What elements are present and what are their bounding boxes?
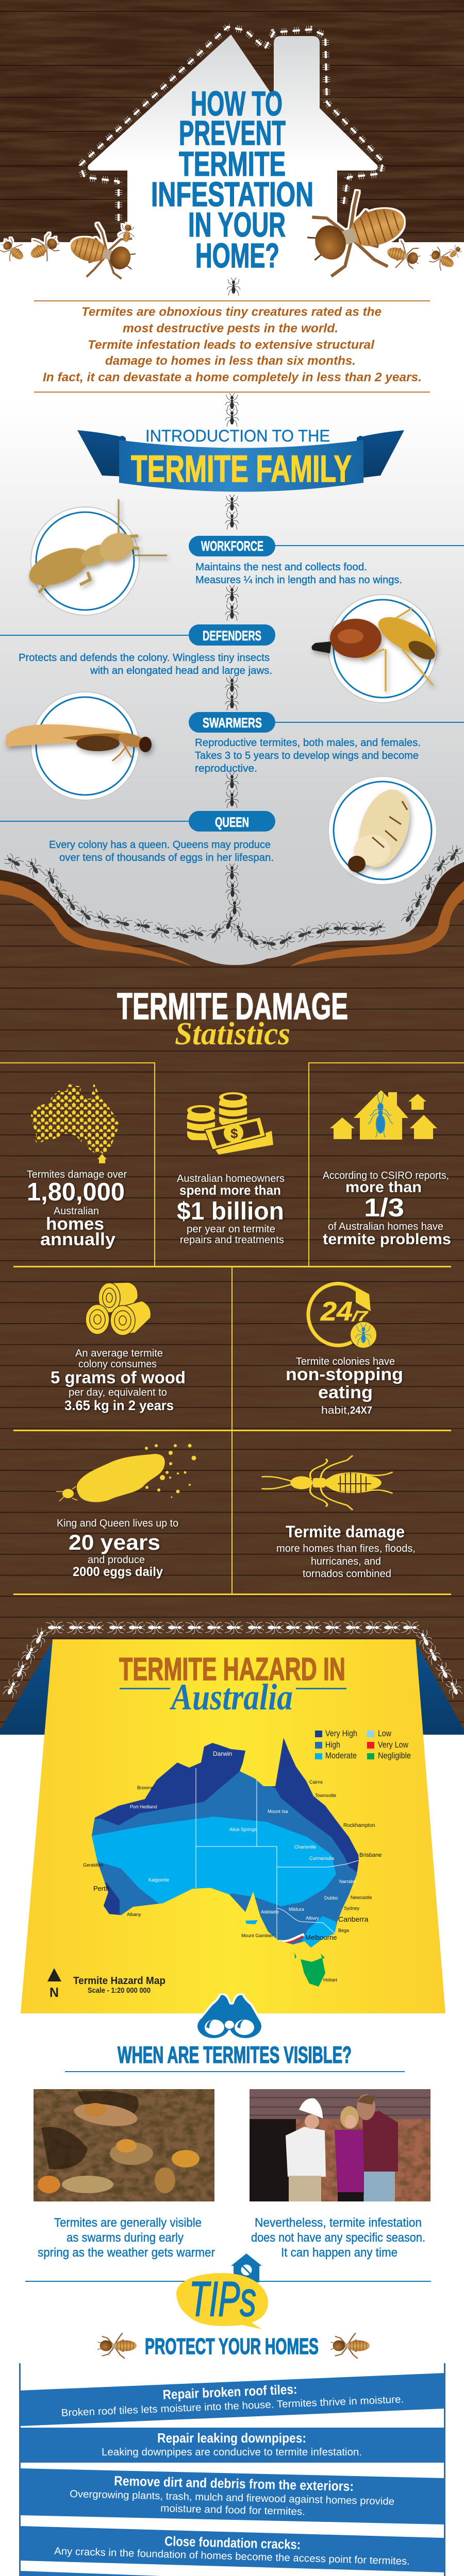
stat: spend: per year on termite — [187, 1224, 275, 1235]
map labels — [83, 1750, 382, 1982]
map labels: Dubbo — [324, 1895, 338, 1901]
white termite border — [2, 1621, 464, 1699]
stat: one third — [323, 1170, 451, 1248]
stat: termite damage comparison: tornados combined — [303, 1568, 391, 1580]
stat: spend: $1 billion — [177, 1198, 284, 1225]
map legend: Very Low — [378, 1740, 409, 1750]
stat: non-stopping eating: Termite colonies have — [296, 1356, 395, 1367]
stat: non-stopping eating: 24X7 — [350, 1405, 372, 1416]
icon: 24/7 clock — [308, 1283, 376, 1348]
workforce text — [195, 562, 402, 586]
swarmers text: Reproductive termites, both males, and females. — [195, 737, 421, 749]
stat: king and queen lifespan: King and Queen lives up to — [57, 1518, 178, 1529]
map legend: Low — [378, 1728, 392, 1738]
title: IN YOUR — [188, 206, 286, 244]
map labels: Mount Isa — [268, 1809, 288, 1814]
orange soil bands — [0, 880, 464, 967]
stat: king and queen lifespan: 2000 eggs daily — [73, 1565, 163, 1579]
swarmers text: reproductive. — [195, 763, 257, 774]
stat: king and queen lifespan — [57, 1518, 178, 1579]
tip: dirt and debris: Remove dirt and debris from the exteriors: — [114, 2473, 354, 2494]
visible text right: Nevertheless, termite infestation — [255, 2216, 422, 2230]
workforce text: Maintains the nest and collects food. — [195, 562, 367, 573]
title: HOME? — [195, 236, 279, 275]
icon: coins and cash — [187, 1092, 273, 1155]
map labels: Sydney — [344, 1906, 360, 1911]
termite trail around house — [80, 27, 383, 221]
stat: spend: repairs and treatments — [180, 1234, 284, 1246]
map legend: Very High — [325, 1728, 357, 1738]
intro paragraph — [43, 305, 422, 384]
map labels: Mount Gambier — [241, 1933, 273, 1938]
hazard heading: TERMITE HAZARD IN — [119, 1652, 345, 1687]
map labels: Albany — [127, 1912, 141, 1917]
intro paragraph: Termites are obnoxious tiny creatures rated as the — [81, 305, 382, 319]
visible text left: as swarms during early — [67, 2231, 184, 2245]
statistics wood background — [0, 855, 464, 1735]
stat: spend: Australian homeowners — [177, 1173, 285, 1184]
title: TERMITE — [179, 145, 286, 183]
workforce text: Measures ¼ inch in length and has no wings. — [195, 574, 402, 586]
tip: foundation cracks: Any cracks in the foundation of homes become the access point for termites. — [54, 2546, 410, 2567]
stat: homes damaged: annually — [40, 1230, 115, 1249]
photo: inspector with homeowners — [250, 2089, 430, 2201]
visible text right: does not have any specific season. — [251, 2231, 425, 2245]
map labels: Port Hedland — [130, 1804, 157, 1809]
stat: termite damage comparison: more homes than fires, floods, — [276, 1543, 416, 1554]
intro section background — [0, 242, 464, 965]
tip: roof tiles: Repair broken roof tiles: — [162, 2381, 297, 2402]
protect heading: PROTECT YOUR HOMES — [145, 2334, 319, 2359]
map caption: Scale - 1:20 000 000 — [88, 1986, 151, 1995]
statistics script heading: Statistics — [175, 1016, 290, 1052]
defender termite — [311, 608, 442, 691]
map labels: Brisbane — [359, 1852, 382, 1858]
icon: termite silhouette — [261, 1455, 393, 1510]
intro rule top — [34, 300, 430, 301]
map caption — [73, 1975, 165, 1995]
stat: wood consumption: An average termite — [75, 1348, 163, 1359]
tips badge — [176, 2272, 268, 2329]
intro paragraph: Termite infestation leads to extensive structural — [88, 338, 375, 352]
map labels: Hobart — [323, 1977, 338, 1982]
stat: non-stopping eating — [286, 1356, 403, 1416]
map labels: Geraldton — [83, 1862, 104, 1868]
stat: homes damaged: homes — [46, 1214, 104, 1234]
map labels: Bega — [338, 1928, 349, 1933]
tip: dirt and debris: moisture and food for termites. — [160, 2503, 305, 2518]
queen label: QUEEN — [215, 815, 249, 830]
defenders text: Protects and defends the colony. Wingless tiny insects — [19, 652, 270, 664]
map of Australia — [77, 1738, 382, 1987]
queen text: over tens of thousands of eggs in her lifespan. — [59, 852, 274, 863]
hazard poster — [21, 1639, 445, 2013]
banner heading large: TERMITE FAMILY — [131, 448, 352, 490]
stat: non-stopping eating: non-stopping — [286, 1365, 403, 1384]
termite chain — [220, 393, 241, 933]
icon: 24/7 clock: 24 — [320, 1297, 353, 1327]
swarmer termite — [6, 724, 152, 761]
title: HOW TO — [191, 84, 283, 123]
visible text right — [251, 2216, 425, 2260]
stat: one third: more than — [345, 1179, 422, 1196]
workforce label: WORKFORCE — [201, 538, 263, 554]
protect heading — [97, 2333, 370, 2359]
queen section — [0, 776, 437, 885]
hazard script heading: Australia — [170, 1676, 293, 1718]
icon: binoculars — [197, 1995, 261, 2038]
tip: dirt and debris: Overgrowing plants, trash, mulch and firewood against homes provide — [70, 2488, 394, 2507]
title: INFESTATION — [151, 175, 313, 214]
brown termites crawling on house base — [0, 180, 464, 287]
map labels: Broome — [137, 1785, 154, 1790]
stat: wood consumption: per day, equivalent to — [69, 1387, 167, 1398]
stat: homes damaged: Termites damage over — [27, 1169, 127, 1180]
Tasmania — [301, 1958, 325, 1987]
tips badge: TIPs — [189, 2272, 256, 2327]
tips rule — [25, 2281, 431, 2282]
icon: logs — [86, 1282, 151, 1335]
map legend: High — [325, 1740, 340, 1750]
workforce termite — [24, 499, 167, 593]
title: PREVENT — [179, 114, 286, 152]
stat: wood consumption: colony consumes — [78, 1359, 157, 1370]
stat: one third: of Australian homes have — [328, 1221, 443, 1232]
stat: wood consumption: 5 grams of wood — [51, 1368, 186, 1387]
tip: downpipes: Repair leaking downpipes: — [157, 2430, 306, 2446]
defenders text: with an elongated head and large jaws. — [90, 665, 272, 676]
icon: houses forming Australia — [31, 1082, 119, 1163]
statistics heading: TERMITE DAMAGE — [117, 986, 348, 1027]
map labels: Adelaide — [261, 1909, 279, 1914]
statistics grid lines — [0, 1062, 464, 1595]
swarmers label: SWARMERS — [203, 715, 262, 731]
tip: foundation cracks: Close foundation cracks: — [164, 2533, 301, 2552]
tips panel frame — [19, 2363, 445, 2576]
queen text: Every colony has a queen. Queens may produce — [49, 839, 271, 851]
tip: foundation cracks — [20, 2526, 444, 2572]
stat: termite damage comparison: hurricanes, and — [311, 1556, 381, 1567]
visible text right: It can happen any time — [281, 2246, 397, 2260]
stat: king and queen lifespan: and produce — [88, 1554, 145, 1566]
map labels: Albury — [306, 1916, 319, 1921]
icon: houses with termite — [330, 1090, 437, 1140]
map caption: Termite Hazard Map — [73, 1975, 165, 1987]
intro paragraph: most destructive pests in the world. — [123, 321, 338, 335]
tip: downpipes: Leaking downpipes are conducive to termite infestation. — [102, 2447, 362, 2458]
stat: wood consumption: 3.65 kg in 2 years — [64, 1398, 174, 1413]
stat: one third: 1/3 — [364, 1193, 404, 1222]
visible text left: spring as the weather gets warmer — [38, 2246, 215, 2260]
stat: homes damaged: Australian — [54, 1206, 99, 1217]
defenders text — [19, 652, 272, 676]
tip: dirt and debris — [20, 2468, 444, 2524]
stat: king and queen lifespan: 20 years — [69, 1530, 160, 1554]
tip: roof tiles — [20, 2373, 444, 2426]
stat: one third: termite problems — [323, 1231, 451, 1248]
small termite — [227, 278, 240, 296]
defenders label: DEFENDERS — [203, 628, 261, 643]
stat: termite damage comparison: Termite damage — [286, 1522, 405, 1541]
map labels: Kalgoorlie — [148, 1877, 169, 1883]
map labels: Narrabri — [339, 1879, 356, 1884]
title — [151, 84, 313, 275]
icon: 24/7 clock: /7 — [351, 1308, 369, 1324]
tip: downpipes — [20, 2428, 444, 2463]
tip: garden mulch — [20, 2571, 444, 2576]
visible text left: Termites are generally visible — [54, 2216, 202, 2230]
icon: house with no sign — [231, 2253, 262, 2282]
workforce section — [24, 499, 464, 615]
map labels: Cairns — [309, 1780, 323, 1785]
north arrow — [47, 1968, 61, 2000]
stat: wood consumption — [51, 1348, 186, 1413]
map legend: Moderate — [325, 1751, 357, 1760]
photo: termites in wood — [34, 2089, 214, 2201]
stat: one third: According to CSIRO reports, — [323, 1170, 449, 1181]
queen text — [49, 839, 274, 863]
north arrow: N — [49, 1985, 59, 2000]
swarmers section — [6, 692, 464, 800]
map labels: Newcastle — [351, 1895, 372, 1900]
stat: non-stopping eating: eating — [318, 1383, 373, 1402]
map labels: Darwin — [213, 1750, 232, 1757]
icon: coins and cash: $ — [230, 1126, 238, 1141]
banner heading small: INTRODUCTION TO THE — [145, 427, 330, 445]
stat: homes damaged — [27, 1169, 127, 1249]
stat: homes damaged: 1,80,000 — [27, 1178, 125, 1206]
map labels: Alice Springs — [229, 1827, 257, 1832]
map labels: Townsville — [315, 1793, 336, 1798]
defenders section — [0, 595, 442, 703]
dark inner wood corners — [0, 862, 464, 927]
map labels: Canberra — [338, 1915, 369, 1923]
map legend: Negligible — [378, 1751, 411, 1760]
top wood background — [0, 0, 464, 247]
stat: spend: spend more than — [179, 1182, 281, 1198]
termites along wave — [3, 843, 464, 952]
white background below wood — [0, 1735, 464, 2576]
intro rule bottom — [34, 392, 430, 393]
house shape — [88, 35, 378, 268]
tip: roof tiles: Broken roof tiles lets moisture into the house. Termites thrive in moisture. — [61, 2394, 404, 2419]
map labels: Perth — [93, 1885, 109, 1892]
map labels: Charleville — [294, 1844, 316, 1850]
stat: spend — [177, 1173, 285, 1246]
map labels: Mildura — [289, 1907, 304, 1912]
swarmers text — [195, 737, 421, 774]
map legend — [315, 1728, 411, 1760]
visible text left — [38, 2216, 215, 2260]
stat: non-stopping eating: habit, — [321, 1405, 350, 1416]
icon: queen and eggs — [56, 1444, 196, 1502]
stat: termite damage comparison — [276, 1522, 416, 1580]
ribbon banner — [77, 427, 404, 492]
intro paragraph: In fact, it can devastate a home completely in less than 2 years. — [43, 370, 422, 384]
map labels: Cunnamulla — [309, 1856, 334, 1861]
map labels: Melbourne — [305, 1934, 337, 1941]
visible rule — [65, 2071, 405, 2072]
map labels: Rockhampton — [343, 1823, 375, 1828]
navy poster shadow — [0, 1642, 464, 1735]
swarmers text: Takes 3 to 5 years to develop wings and become — [195, 750, 419, 761]
statistics heading — [117, 986, 348, 1052]
intro paragraph: damage to homes in less than six months. — [105, 354, 356, 368]
queen termite — [348, 783, 419, 874]
